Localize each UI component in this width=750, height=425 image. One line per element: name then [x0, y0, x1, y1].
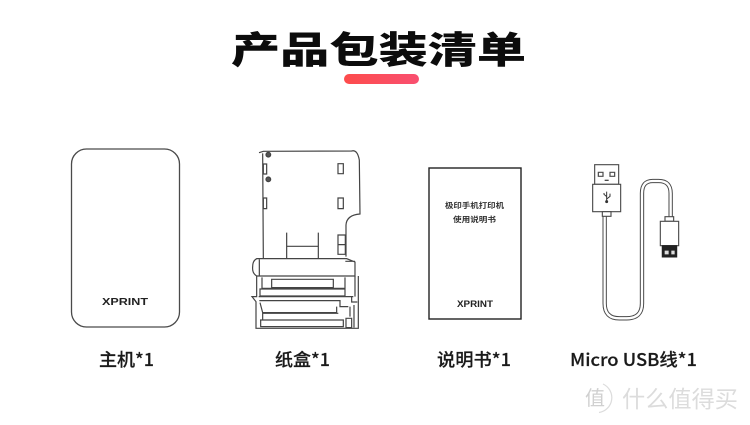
- printer outline: [72, 149, 180, 327]
- micro USB neck: [665, 217, 674, 221]
- item: micro USB cable: [593, 165, 679, 318]
- USB-A housing: [593, 184, 621, 212]
- watermark badge: [585, 384, 612, 412]
- tray base frame: [252, 276, 358, 328]
- manual title: 极印手机打印机: [445, 200, 505, 210]
- label: paper box: 纸盒*1: [275, 347, 330, 372]
- label: printer: 主机*1: [99, 347, 154, 372]
- title underline pill: [344, 74, 419, 84]
- tray slots: [263, 164, 345, 254]
- tray screws: [266, 152, 271, 182]
- paper tray outline: [259, 151, 360, 258]
- watermark badge: 值: [585, 387, 605, 410]
- manual cover: [429, 168, 521, 319]
- watermark text: 什么值得买: [622, 386, 738, 412]
- micro USB tip: [662, 246, 677, 257]
- tray lower band: [253, 259, 355, 276]
- watermark: [585, 384, 738, 412]
- cable: [605, 181, 671, 318]
- tray centre tab: [287, 233, 318, 258]
- label: manual: 说明书*1: [437, 347, 511, 372]
- label: cable: Micro USB线*1: [570, 347, 697, 372]
- item: printer body: [72, 149, 180, 327]
- manual logo: XPRINT: [457, 299, 493, 310]
- printer logo: XPRINT: [102, 296, 149, 308]
- USB symbol: [604, 192, 610, 203]
- USB-A plug: [595, 165, 619, 184]
- title: 产品包装清单: [231, 31, 526, 71]
- micro USB housing: [660, 221, 679, 246]
- item: paper box drawing: [252, 151, 360, 328]
- USB-A neck: [602, 212, 611, 216]
- item: user manual: [429, 168, 521, 319]
- manual subtitle: 使用说明书: [453, 214, 497, 224]
